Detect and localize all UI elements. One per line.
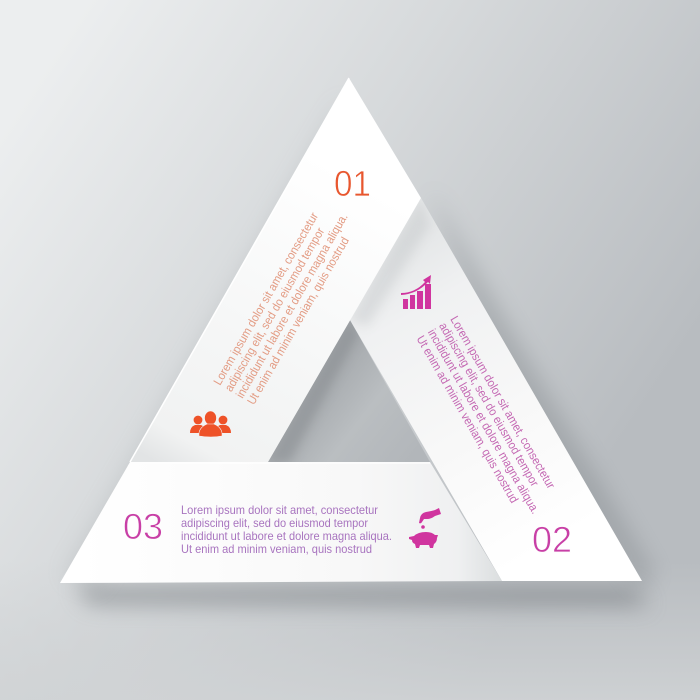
text block 03: Ut enim ad minim veniam, quis nostrud — [181, 542, 372, 556]
number 02: 02 — [532, 519, 572, 560]
text block 01: adipiscing elit, sed do eiusmod tempor — [222, 225, 327, 394]
drop shadow under triangle — [65, 95, 655, 606]
panel 02: right band — [350, 198, 642, 581]
text block 01: Lorem ipsum dolor sit amet, consectetur — [210, 210, 321, 388]
text block 02: adipiscing elit, sed do eiusmod tempor — [436, 320, 542, 489]
text block 01: Ut enim ad minim veniam, quis nostrud — [244, 235, 352, 407]
icon: growth chart — [401, 275, 431, 309]
text block 03: incididunt ut labore et dolore magna aliqua. — [181, 529, 392, 543]
number 01: 01 — [334, 163, 371, 204]
panel 03: bottom band — [60, 462, 502, 583]
text block 03 — [181, 503, 392, 556]
icon: hand and piggy bank — [409, 508, 441, 548]
text block 02: Lorem ipsum dolor sit amet, consectetur — [447, 314, 558, 491]
fold shadow cast by band 01 — [353, 206, 428, 324]
text block 03: Lorem ipsum dolor sit amet, consectetur — [181, 503, 378, 517]
centre triangular opening — [268, 320, 430, 462]
icon: people — [190, 411, 231, 437]
text block 02: Ut enim ad minim veniam, quis nostrud — [414, 333, 521, 505]
panel 01: left band — [130, 78, 421, 462]
text block 01: incididunt ut labore et dolore magna aliqua. — [233, 211, 351, 400]
band 01 left-edge highlight — [130, 78, 349, 462]
text block 03: adipiscing elit, sed do eiusmod tempor — [181, 516, 368, 530]
number 03: 03 — [123, 506, 163, 547]
text block 02: incididunt ut labore et dolore magna aliqua. — [425, 326, 543, 516]
band 03 top highlight — [130, 462, 430, 464]
